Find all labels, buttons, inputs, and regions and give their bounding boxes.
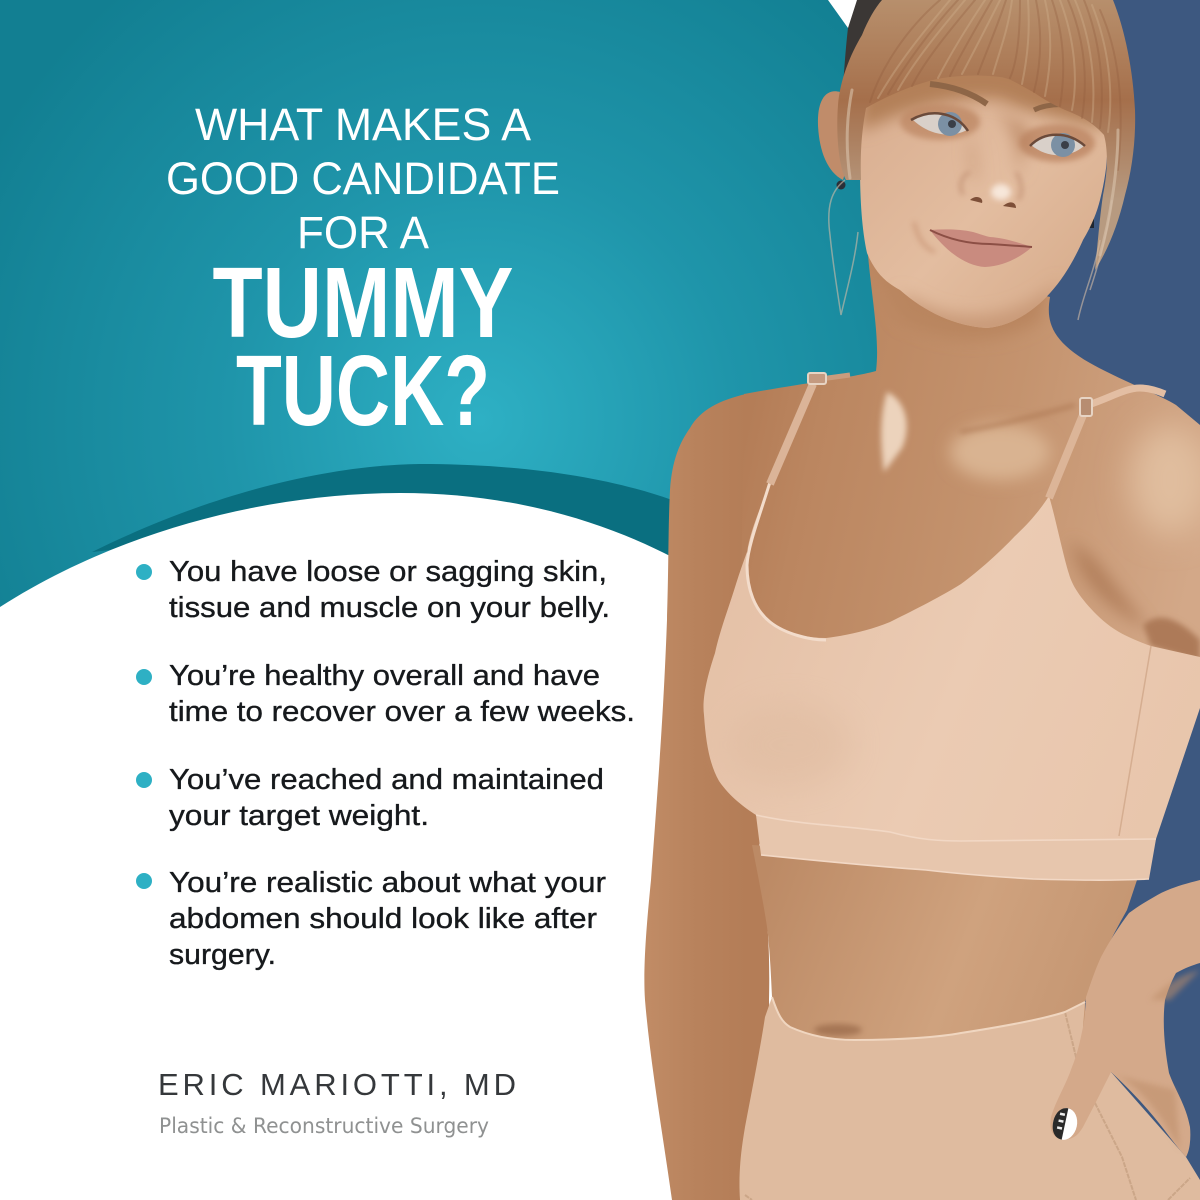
right iris bbox=[1051, 133, 1075, 157]
right upper lid bbox=[1030, 135, 1085, 146]
bullet 2: You’re healthy overall and have bbox=[169, 660, 600, 692]
bullet 4: You’re realistic about what your bbox=[169, 867, 606, 899]
neck, chest and right shoulder bbox=[740, 255, 1200, 660]
hand on hip bbox=[1050, 880, 1200, 1157]
forehead shadow bbox=[862, 76, 1103, 136]
left arm bbox=[644, 394, 800, 1200]
shorts waist edge bbox=[772, 997, 1085, 1040]
neck shadow bbox=[868, 256, 1048, 336]
background: teal panel bbox=[0, 0, 902, 640]
left upper lid bbox=[911, 113, 968, 131]
swoosh: white lower area bbox=[0, 493, 720, 1200]
bullet 4 bbox=[136, 867, 606, 971]
left eyebrow bbox=[930, 84, 987, 104]
bra cup shadow bbox=[728, 703, 852, 787]
nose sides bbox=[961, 172, 1022, 200]
left eye socket bbox=[900, 104, 980, 140]
bullet 4: surgery. bbox=[169, 939, 276, 971]
shorts seams bbox=[745, 1012, 1190, 1200]
right strap bbox=[1049, 415, 1083, 498]
hand shading bbox=[1115, 970, 1200, 1150]
left iris bbox=[938, 112, 962, 136]
right eyebrow bbox=[1034, 104, 1090, 110]
title: GOOD CANDIDATE bbox=[166, 153, 560, 204]
navel shadow bbox=[814, 1024, 862, 1036]
background: navy panel bbox=[900, 0, 1200, 1200]
left strap top bbox=[813, 375, 850, 380]
title: TUCK? bbox=[236, 335, 490, 447]
nose highlight bbox=[991, 184, 1011, 200]
cheek dimple bbox=[914, 222, 935, 252]
right shoulder highlight bbox=[1130, 425, 1200, 535]
ear bbox=[818, 91, 860, 180]
bullet 3: You’ve reached and maintained bbox=[169, 764, 604, 796]
nostrils bbox=[970, 197, 1016, 208]
right pupil bbox=[1061, 141, 1069, 149]
hair and fringe bbox=[837, 0, 1135, 270]
collarbone highlight bbox=[950, 424, 1050, 480]
armpit crease bbox=[1143, 618, 1200, 662]
bullet 1 bbox=[136, 556, 610, 624]
logo: ERIC MARIOTTI, MD bbox=[158, 1067, 516, 1102]
logo: Plastic & Reconstructive Surgery bbox=[159, 1114, 489, 1138]
high-waisted shorts bbox=[739, 997, 1200, 1200]
hair strands bbox=[847, 0, 1121, 255]
right strap top bbox=[1088, 388, 1165, 405]
nose bridge shadow bbox=[968, 112, 1032, 171]
neck highlight bbox=[881, 392, 907, 472]
jaw shadow bbox=[906, 288, 1054, 328]
title: WHAT MAKES A bbox=[195, 99, 531, 150]
skin shading bbox=[868, 250, 1200, 662]
decorated thumbnail bbox=[1050, 1106, 1080, 1142]
bullet 3 bbox=[136, 764, 604, 832]
photo: woman bbox=[644, 0, 1200, 1200]
collarbone crease bbox=[960, 405, 1075, 432]
right eye bbox=[1031, 135, 1084, 155]
bullet 1: You have loose or sagging skin, bbox=[169, 556, 607, 588]
dark hair at the crown bbox=[843, 0, 884, 92]
bra side seam bbox=[1119, 646, 1151, 836]
face bbox=[858, 50, 1107, 328]
bullet 1: tissue and muscle on your belly. bbox=[169, 592, 610, 624]
face shading bbox=[862, 76, 1103, 328]
band edges bbox=[756, 815, 1156, 880]
mouth line bbox=[930, 230, 1032, 247]
logo bbox=[158, 1067, 516, 1138]
bra neckline binding bbox=[747, 482, 826, 640]
armpit shadow bbox=[1070, 544, 1144, 626]
bullet 2: time to recover over a few weeks. bbox=[169, 696, 635, 728]
loose hair strands bbox=[829, 180, 1112, 320]
left eye bbox=[913, 114, 967, 135]
title: TUMMY bbox=[212, 247, 514, 359]
bullet 4: abdomen should look like after bbox=[169, 903, 597, 935]
left pupil bbox=[948, 120, 956, 128]
right eye socket bbox=[1019, 124, 1095, 162]
left earring bbox=[836, 180, 846, 190]
title bbox=[166, 99, 560, 447]
bullet 3: your target weight. bbox=[169, 800, 429, 832]
bullet 2 bbox=[136, 660, 635, 728]
lips bbox=[930, 229, 1032, 267]
left buckle bbox=[808, 373, 826, 384]
title: FOR A bbox=[297, 207, 429, 258]
bra top bbox=[703, 482, 1200, 841]
left strap bbox=[770, 384, 813, 484]
right earring bbox=[1089, 218, 1094, 228]
swoosh: dark teal band bbox=[92, 464, 672, 560]
bullet list bbox=[136, 556, 635, 971]
abdomen bbox=[752, 845, 1142, 1040]
right buckle bbox=[1080, 398, 1092, 416]
bra band bbox=[756, 815, 1156, 880]
